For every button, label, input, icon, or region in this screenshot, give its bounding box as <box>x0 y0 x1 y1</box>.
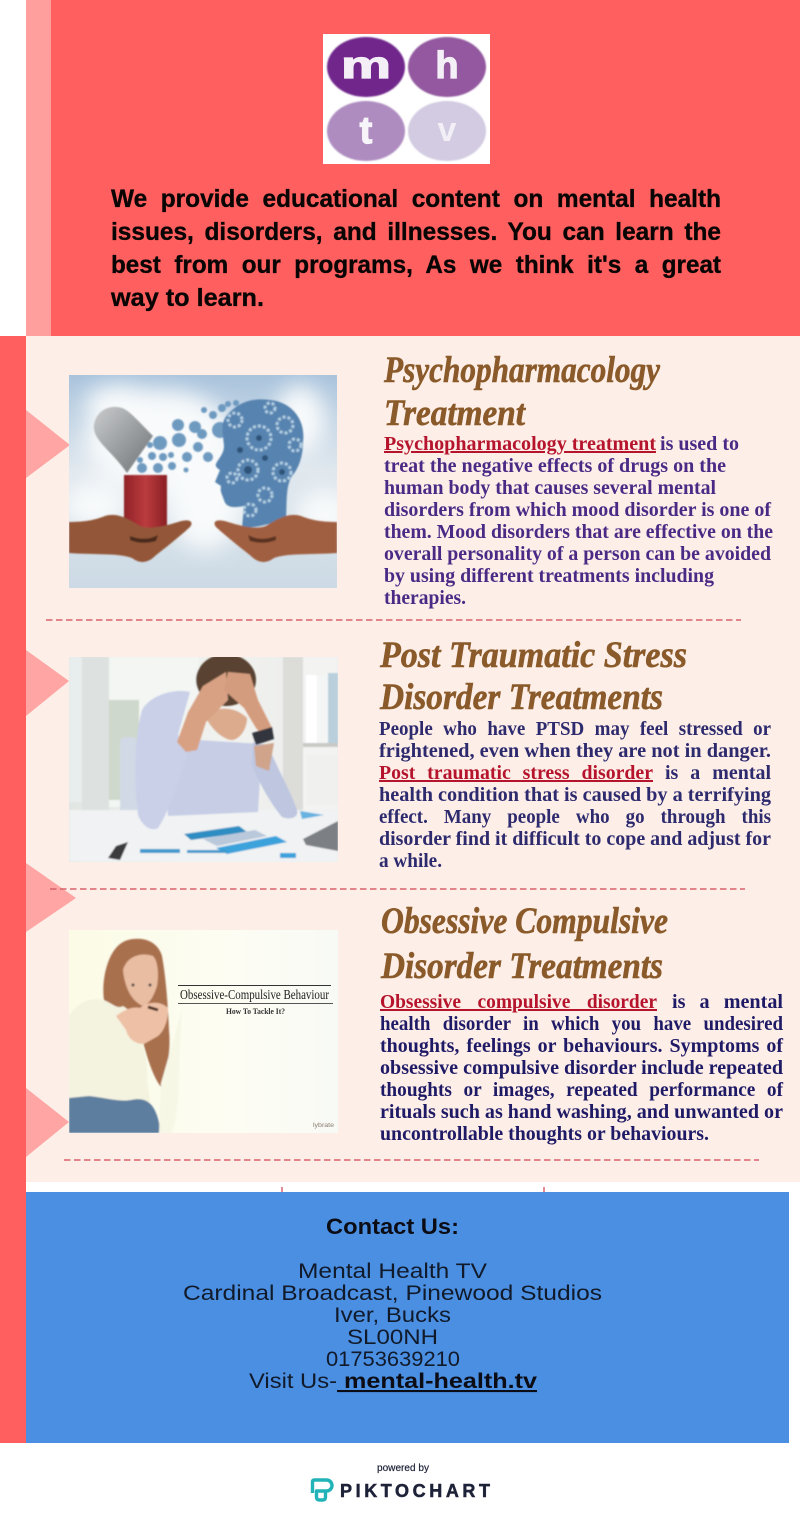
text block: intro: issues, disorders, and illnesses. You can learn the <box>111 218 721 246</box>
heading: Obsessive Compulsive Disorder Treatments <box>380 901 668 987</box>
heading: Obsessive Compulsive Disorder Treatments: Obsessive Compulsive <box>381 901 668 942</box>
text block: OCD description: is a mental <box>672 991 783 1013</box>
heading: Post Traumatic Stress Disorder Treatments: Post Traumatic Stress <box>379 635 687 676</box>
text block: PTSD description: frightened, even when they are not in danger. <box>379 740 771 762</box>
text block: psychopharmacology description: them. Mood disorders that are effective on the <box>384 521 773 543</box>
text block: PTSD description: Post traumatic stress disorder <box>379 762 653 784</box>
icon: pointer triangles <box>26 410 76 1157</box>
heading: Contact Us: Contact Us: <box>326 1214 459 1239</box>
footer: powered by Piktochart <box>312 1463 490 1501</box>
text block: intro: best from our programs, As we think it's a great <box>111 251 722 279</box>
text block: PTSD description: effect. Many people who go through this <box>379 806 771 828</box>
text block: psychopharmacology description: disorders from which mood disorder is one of <box>384 499 771 521</box>
text block: intro: We provide educational content on mental health <box>111 185 721 213</box>
icon: mhtv logo: m <box>341 45 391 87</box>
icon: mhtv logo: h <box>435 45 459 87</box>
text block: PTSD description: disorder find it difficult to cope and adjust for <box>379 828 771 850</box>
text block: OCD description: thoughts, feelings or behaviours. Symptoms of <box>380 1035 783 1057</box>
text block: PTSD description: is a mental <box>665 762 771 784</box>
icon: mhtv logo <box>323 34 490 164</box>
image: anxious woman with Obsessive-Compulsive Behaviour caption: lybrate <box>313 1123 335 1129</box>
text block: psychopharmacology description: therapies. <box>384 587 466 609</box>
text block: psychopharmacology description: treat the negative effects of drugs on the <box>384 455 726 477</box>
icon: mhtv logo: v <box>438 111 457 149</box>
text block: PTSD description: People who have PTSD may feel stressed or <box>379 718 771 740</box>
image: anxious woman with Obsessive-Compulsive Behaviour caption: Obsessive-Compulsive Behaviour <box>180 988 329 1003</box>
text block: psychopharmacology description <box>384 433 773 609</box>
text block: OCD description: obsessive compulsive disorder include repeated <box>380 1057 783 1079</box>
panel: header background <box>26 0 800 336</box>
text block: contact details: mental-health.tv <box>337 1370 537 1393</box>
text block: psychopharmacology description: by using different treatments including <box>384 565 714 587</box>
heading: Psychopharmacology Treatment: Treatment <box>384 393 527 434</box>
heading: Post Traumatic Stress Disorder Treatments: Disorder Treatments <box>379 677 663 718</box>
text block: psychopharmacology description: is used to <box>660 433 739 455</box>
text block: psychopharmacology description: human body that causes several mental <box>384 477 716 499</box>
text block: PTSD description: a while. <box>379 850 442 872</box>
image: capsule releasing gears toward a head <box>63 375 355 588</box>
text block: contact details: Mental Health TV <box>298 1260 487 1283</box>
heading: Psychopharmacology Treatment <box>383 350 660 434</box>
text block: OCD description: health disorder in which you have undesired <box>380 1013 783 1035</box>
text block: OCD description: thoughts or images, repeated performance of <box>380 1079 783 1101</box>
text block: OCD description <box>380 991 783 1145</box>
text block: OCD description: rituals such as hand washing, and unwanted or <box>380 1101 783 1123</box>
text block: intro <box>110 185 722 312</box>
image: anxious woman with Obsessive-Compulsive Behaviour caption <box>69 930 338 1133</box>
heading: Obsessive Compulsive Disorder Treatments: Disorder Treatments <box>380 946 663 987</box>
panel: treatments background <box>0 336 800 1443</box>
panel: contact <box>26 1192 789 1443</box>
heading: Psychopharmacology Treatment: Psychopharmacology <box>383 350 660 391</box>
icon: mhtv logo: t <box>360 110 373 152</box>
text block: contact details: SL00NH <box>347 1326 438 1349</box>
text block: psychopharmacology description: Psychopharmacology treatment <box>384 433 656 455</box>
text block: contact details: 01753639210 <box>326 1348 460 1371</box>
text block: PTSD description: health condition that is caused by a terrifying <box>379 784 771 806</box>
text block: contact details: Iver, Bucks <box>334 1304 451 1327</box>
text block: contact details: Cardinal Broadcast, Pinewood Studios <box>183 1282 602 1305</box>
image: stressed man at a desk <box>69 654 338 862</box>
footer: powered by Piktochart: powered by <box>377 1463 429 1474</box>
footer: powered by Piktochart: PIKTOCHART <box>340 1481 490 1501</box>
heading: Post Traumatic Stress Disorder Treatments <box>379 635 687 718</box>
text block: PTSD description <box>379 718 771 872</box>
text block: contact details: Visit Us- <box>249 1370 337 1393</box>
text block: contact details <box>183 1260 602 1393</box>
text block: intro: way to learn. <box>110 284 264 312</box>
text block: psychopharmacology description: overall personality of a person can be avoided <box>384 543 771 565</box>
text block: OCD description: Obsessive compulsive disorder <box>380 991 657 1013</box>
image: anxious woman with Obsessive-Compulsive Behaviour caption: How To Tackle It? <box>226 1007 285 1016</box>
text block: OCD description: uncontrollable thoughts or behaviours. <box>380 1123 709 1145</box>
